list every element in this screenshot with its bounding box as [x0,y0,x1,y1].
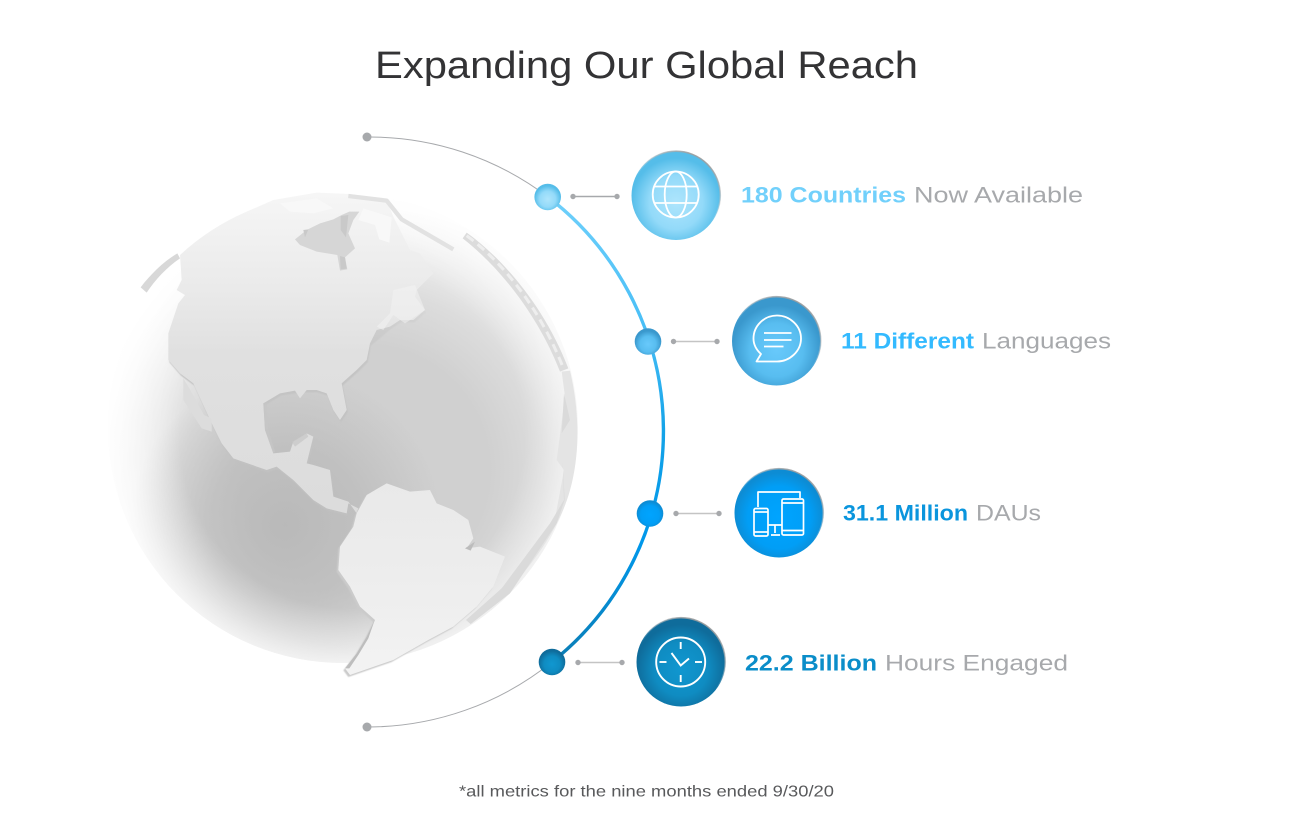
node [637,500,663,527]
label: 22.2 Billion [745,650,877,676]
node [635,328,661,355]
blue gradient arc [548,197,663,662]
label secondary: Languages [982,328,1111,354]
connector [575,660,625,665]
label: 11 Different [841,328,975,354]
node [539,649,565,675]
icon: speech bubble [732,296,821,386]
globe [107,192,579,680]
infographic canvas [134,50,1110,796]
globe rim strips [141,233,577,624]
connector [673,511,722,516]
node [534,184,561,210]
title: Expanding Our Global Reach [375,45,918,87]
icon: devices [734,468,824,558]
label: 31.1 Million [843,500,968,526]
continent: South America [337,483,505,677]
thin grey arc, top [367,137,548,197]
connector [570,194,620,199]
metric row: DAUs [637,468,1041,558]
metric row: hours [539,618,1068,706]
continent: North America [168,193,453,516]
thin grey arc, bottom [367,662,552,727]
globe sphere [134,233,578,663]
icon: clock [636,618,726,706]
label secondary: DAUs [976,500,1041,526]
label: 180 Countries [741,183,906,208]
arc end dot, top [362,132,372,142]
connector [671,339,720,344]
label secondary: Now Available [914,183,1083,208]
footnote: *all metrics for the nine months ended 9/30/20 [459,784,834,800]
arc end dot, bottom [362,722,372,732]
label secondary: Hours Engaged [885,650,1068,676]
metric row: countries [534,151,1083,240]
metric row: languages [635,296,1111,386]
icon: globe [632,151,720,240]
